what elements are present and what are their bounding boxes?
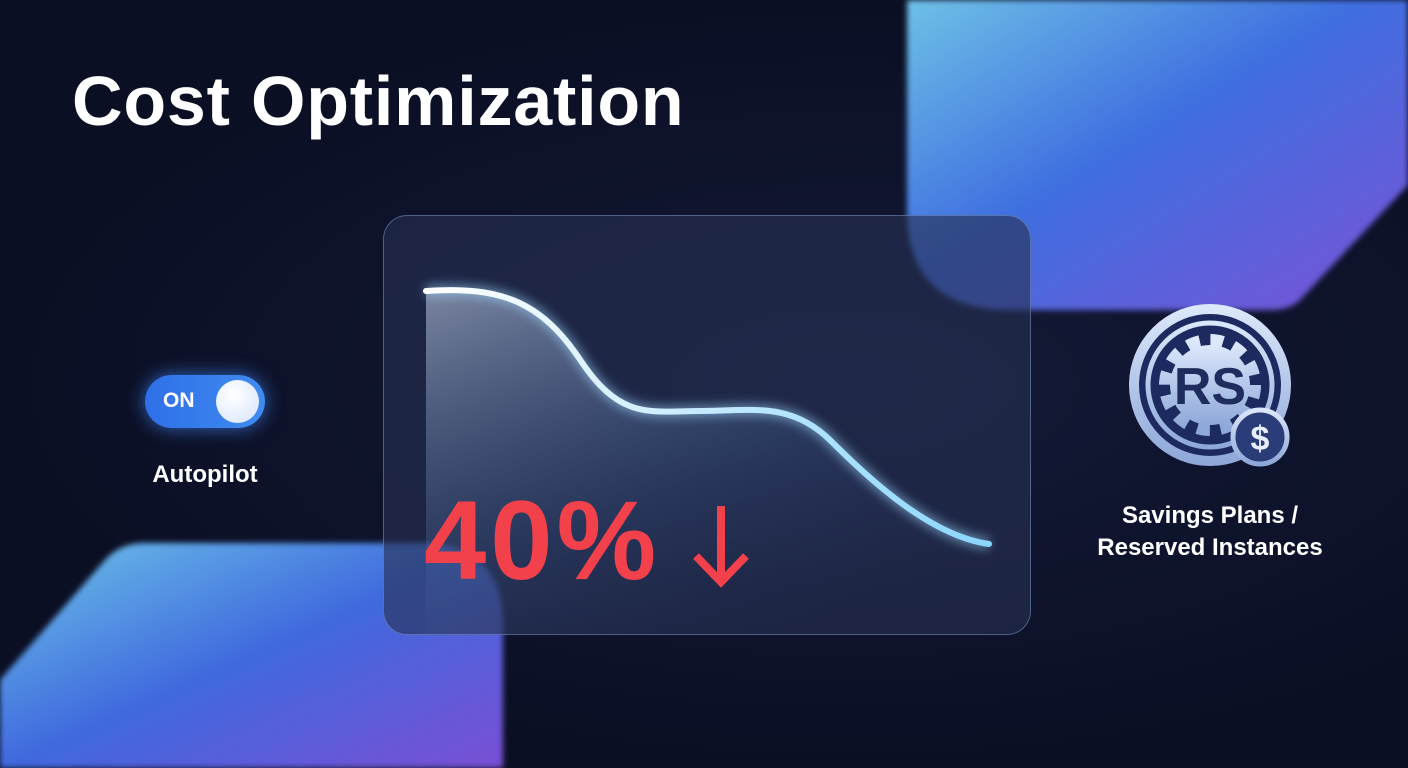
stat: 40% down: 40%	[424, 478, 660, 603]
panel: chart card	[383, 215, 1031, 635]
icon: down arrow	[693, 506, 749, 588]
title: Cost Optimization	[72, 62, 684, 140]
icon: savings gear: RS	[1174, 358, 1246, 416]
toggle: ON: ON	[163, 389, 194, 412]
label: Autopilot: Autopilot	[152, 461, 258, 488]
icon: savings gear	[1129, 304, 1291, 466]
icon: savings gear: $	[1251, 420, 1270, 458]
toggle: ON	[145, 375, 265, 428]
label: Savings Plans / Reserved Instances: Reserved Instances	[1097, 534, 1323, 561]
label: Savings Plans / Reserved Instances: Savings Plans /	[1122, 502, 1298, 529]
label: Savings Plans / Reserved Instances	[1097, 502, 1323, 561]
